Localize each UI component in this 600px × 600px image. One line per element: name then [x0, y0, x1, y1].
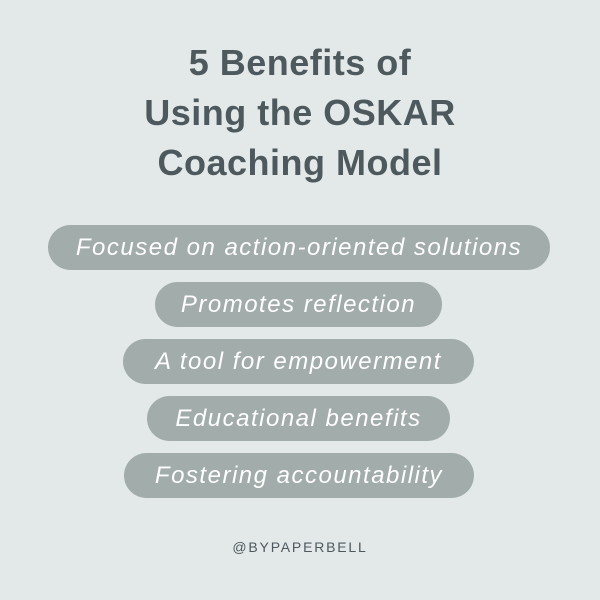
pill: action-oriented solutions: Focused on action-oriented solutions — [76, 234, 522, 261]
title: Using the OSKAR — [144, 92, 456, 133]
pill: reflection: Promotes reflection — [181, 291, 416, 318]
title — [144, 42, 456, 183]
pill: empowerment — [123, 339, 474, 384]
pill: empowerment: A tool for empowerment — [155, 348, 442, 375]
pill: educational — [147, 396, 450, 441]
footer: @BYPAPERBELL — [232, 539, 368, 555]
title: 5 Benefits of — [189, 42, 411, 83]
pill: action-oriented solutions — [48, 225, 550, 270]
title: Coaching Model — [158, 142, 442, 183]
pill: accountability: Fostering accountability — [155, 462, 443, 489]
pill: reflection — [155, 282, 442, 327]
pill: accountability — [124, 453, 474, 498]
pill: educational: Educational benefits — [175, 405, 422, 432]
